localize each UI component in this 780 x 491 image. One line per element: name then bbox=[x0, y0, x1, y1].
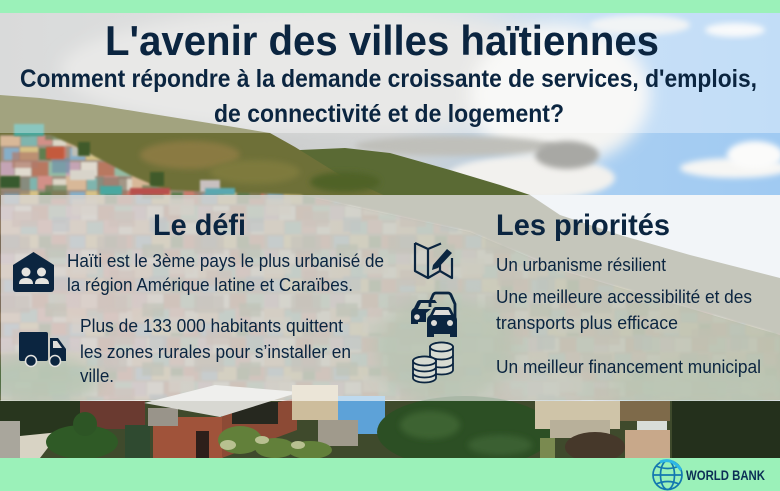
priority: urbanisme: Un urbanisme résilient bbox=[496, 254, 666, 275]
large dark green tree bbox=[377, 396, 553, 468]
wordmark: WORLD BANK bbox=[686, 468, 765, 483]
icon: map with pencil bbox=[415, 243, 452, 278]
text: urbanisation bbox=[67, 250, 384, 295]
clouds bbox=[60, 10, 780, 285]
panel-level hill slope bbox=[280, 195, 780, 400]
text: rural migration bbox=[80, 315, 351, 386]
muted tint over neighbourhood below the band bbox=[0, 195, 780, 400]
shrubs in front bbox=[218, 426, 332, 459]
priority: transports: transports plus efficace bbox=[496, 312, 678, 333]
text: urbanisation: la région Amérique latine et Caraïbes. bbox=[67, 274, 353, 295]
accent houses in hillside band bbox=[0, 124, 235, 195]
bottom mint band bbox=[0, 458, 780, 491]
icon: cars bbox=[411, 293, 457, 337]
brown building with white roof bbox=[144, 385, 300, 458]
dark palm trees bbox=[672, 401, 780, 458]
blue building bbox=[338, 396, 385, 434]
heading: Le défi: Le défi bbox=[153, 209, 246, 242]
subtitle bbox=[20, 65, 757, 128]
icon: truck bbox=[19, 332, 66, 366]
icon: house with people bbox=[13, 252, 54, 292]
World Bank logo bbox=[653, 460, 765, 490]
priority: transports: Une meilleure accessibilité et des bbox=[496, 286, 752, 307]
text: rural migration: les zones rurales pour s’installer en bbox=[80, 341, 351, 362]
icon: coins bbox=[413, 342, 453, 382]
priority: financement: Un meilleur financement municipal bbox=[496, 356, 761, 377]
title: L'avenir des villes haïtiennes bbox=[105, 17, 659, 64]
central translucent panel bbox=[1, 195, 780, 401]
pale buildings behind bbox=[292, 385, 338, 420]
right pale houses bbox=[535, 401, 670, 462]
brown scrub patches on hill bbox=[140, 141, 380, 192]
text: urbanisation: Haïti est le 3ème pays le plus urbanisé de bbox=[67, 250, 384, 271]
left trees and wall bbox=[0, 401, 150, 459]
green hillside bbox=[0, 95, 780, 400]
colourful houses bbox=[0, 135, 780, 400]
text: rural migration: Plus de 133 000 habitants quittent bbox=[80, 315, 343, 336]
icon: globe bbox=[653, 460, 682, 490]
top mint band bbox=[0, 0, 780, 13]
priority: transports bbox=[496, 286, 752, 333]
subtitle: de connectivité et de logement? bbox=[214, 100, 564, 128]
text: rural migration: ville. bbox=[80, 365, 114, 386]
top translucent band bbox=[0, 13, 780, 133]
greener neighbourhood tint bbox=[0, 278, 780, 407]
foreground base bbox=[0, 401, 780, 458]
grey concrete house bbox=[318, 420, 358, 446]
distant ridge bbox=[300, 148, 530, 215]
heading: Les priorités: Les priorités bbox=[496, 209, 670, 242]
